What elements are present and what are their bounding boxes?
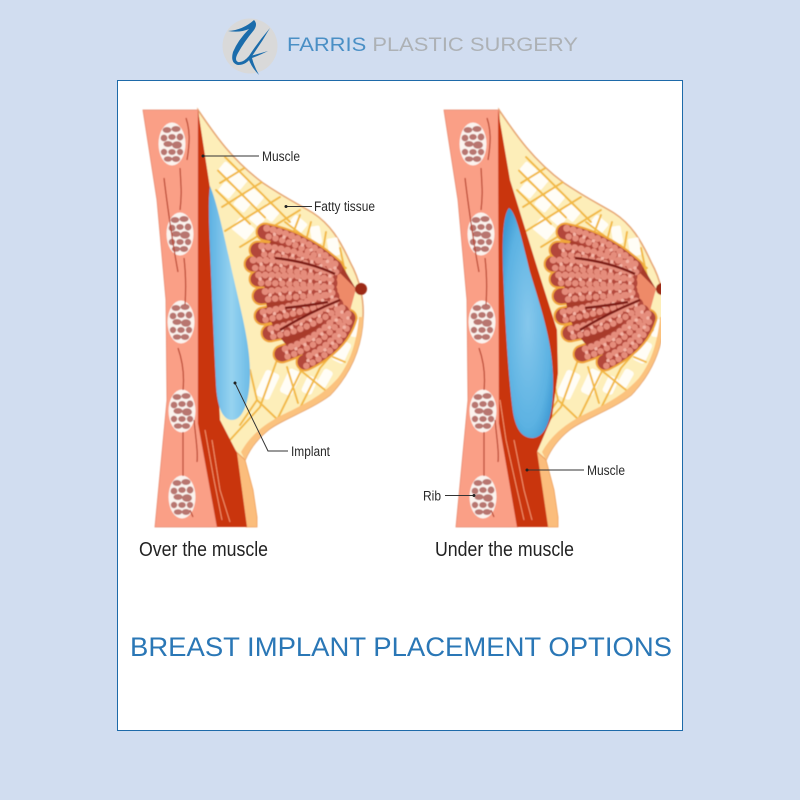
mammary gland lobes [553, 228, 656, 366]
lower breast fold tissue [236, 452, 257, 527]
fatty tissue [499, 110, 664, 460]
diagram: under the muscle [423, 110, 668, 561]
implant [503, 208, 553, 438]
caption: over the muscle: Over the muscle [139, 539, 268, 561]
nipple [655, 282, 661, 296]
brand name: FARRIS PLASTIC SURGERY [287, 35, 578, 56]
label: rib [423, 488, 476, 504]
lower breast fold tissue [537, 452, 558, 527]
white content panel [118, 80, 682, 730]
label: rib: Rib [423, 488, 441, 504]
rib bones [158, 122, 196, 518]
mammary gland lobes [253, 228, 356, 366]
rib bones [460, 122, 496, 518]
title: BREAST IMPLANT PLACEMENT OPTIONS [130, 632, 672, 662]
chest wall streaks [465, 118, 498, 517]
label: muscle [526, 463, 625, 478]
label: muscle: Muscle [587, 463, 625, 478]
chest wall [444, 110, 518, 527]
nipple [355, 283, 367, 295]
diagram: over the muscle [139, 110, 375, 561]
pectoral muscle [498, 110, 558, 527]
muscle fibres [500, 400, 532, 520]
label: muscle [202, 149, 300, 164]
label: muscle: Muscle [262, 149, 300, 164]
label: implant: Implant [291, 444, 330, 459]
label: fatty tissue: Fatty tissue [314, 199, 375, 214]
logo: Farris Plastic Surgery [222, 18, 578, 75]
pectoral muscle [198, 110, 247, 527]
implant [209, 186, 250, 420]
fatty tissue [198, 110, 363, 460]
label: fatty tissue [284, 199, 375, 214]
chest wall streaks [164, 118, 197, 517]
label: implant [234, 382, 330, 459]
cross-section illustration: implant over the muscle [143, 110, 367, 527]
chest wall [143, 110, 217, 527]
icon: logo swirl monogram [222, 18, 278, 75]
muscle fibres [205, 430, 230, 522]
cross-section illustration: implant under the muscle [444, 110, 668, 527]
caption: under the muscle: Under the muscle [435, 539, 574, 561]
